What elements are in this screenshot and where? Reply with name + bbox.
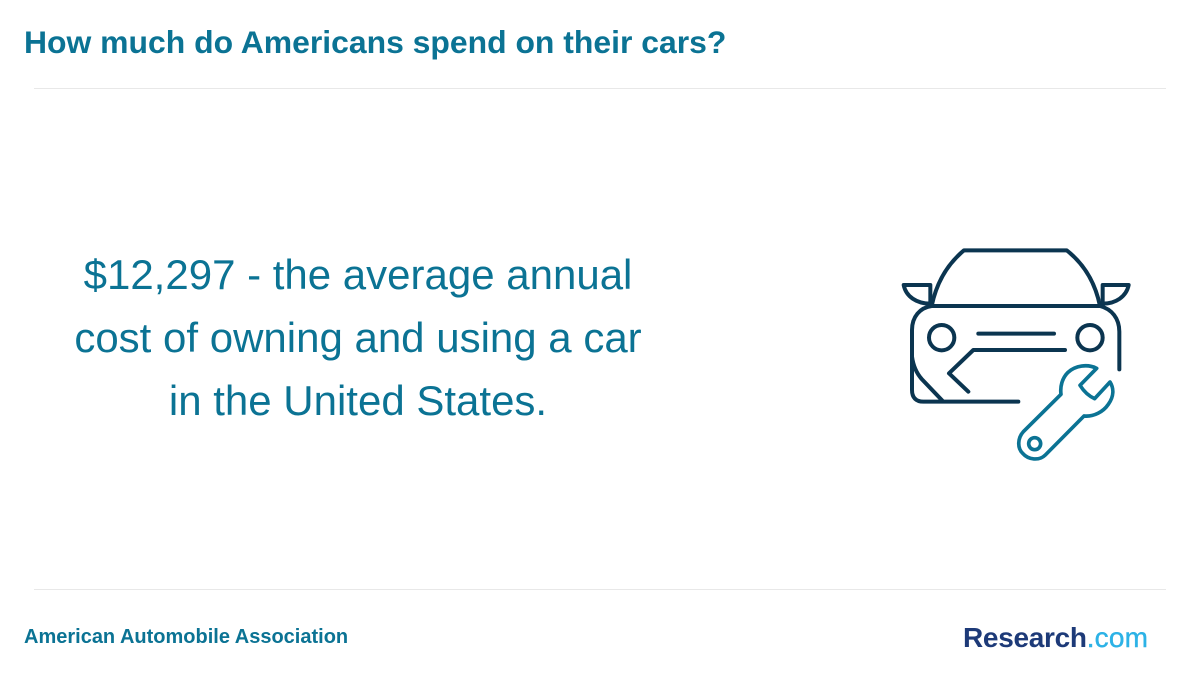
icon: car with wrench	[902, 248, 1131, 461]
main statistic text: cost of owning and using a car	[74, 314, 642, 361]
logo: Research.com: Research.com	[963, 622, 1148, 653]
icon: car	[904, 250, 1129, 402]
source: American Automobile Association	[24, 626, 348, 648]
main statistic text	[74, 251, 642, 424]
title: How much do Americans spend on their cars?	[24, 24, 726, 60]
main statistic text: $12,297 - the average annual	[84, 251, 632, 298]
icon: wrench	[1019, 366, 1113, 459]
main statistic text: in the United States.	[169, 377, 547, 424]
